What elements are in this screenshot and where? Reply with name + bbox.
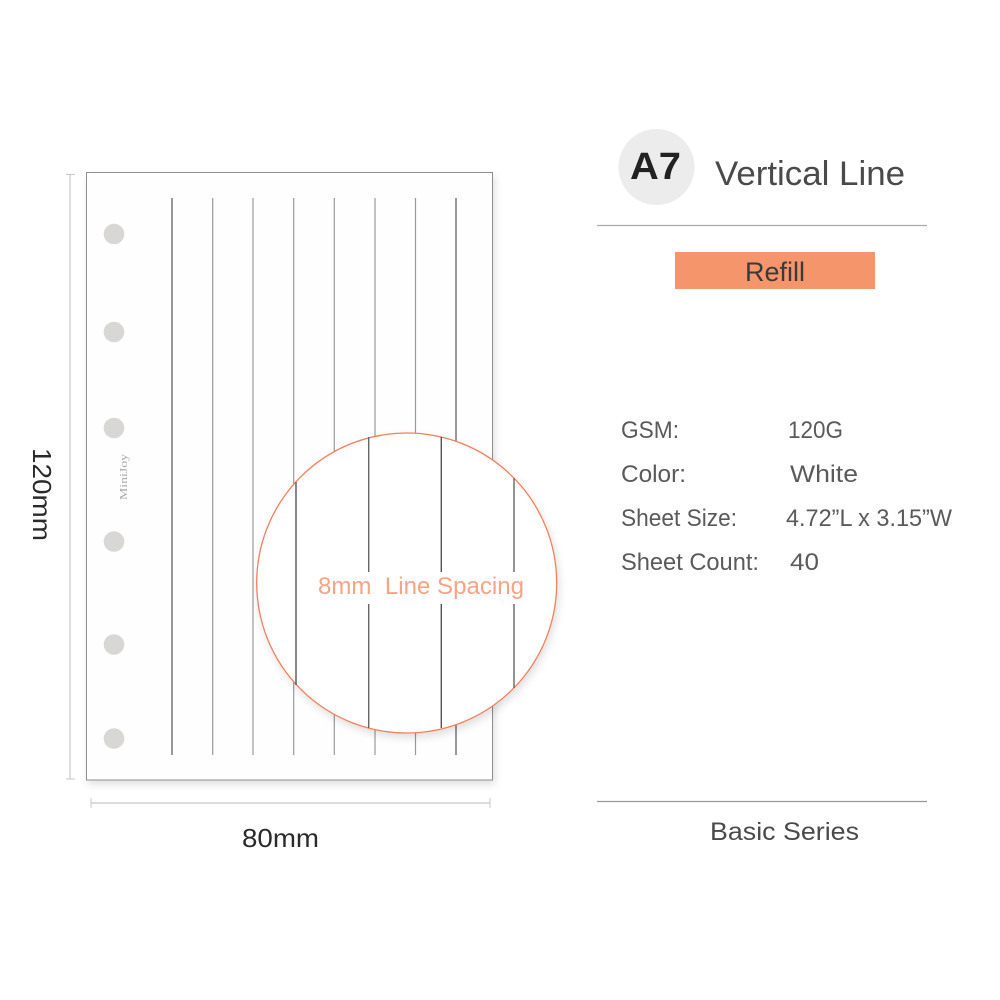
height label: 120mm [27, 448, 57, 541]
spec: sheet size: 4.72”L x 3.15”W [786, 505, 952, 532]
specifications list [621, 417, 952, 576]
spec: GSM: GSM: [621, 417, 679, 444]
vertical ruled lines [172, 198, 456, 755]
spec: sheet count: 40 [790, 549, 819, 576]
width label: 80mm [242, 823, 319, 853]
magnified lines [296, 437, 514, 728]
product title: Vertical Line [715, 155, 905, 193]
spec: GSM: 120G [788, 417, 843, 444]
series label: Basic Series [710, 818, 859, 846]
spec: color: White [790, 461, 858, 488]
magnifier circle [257, 433, 557, 733]
footer divider [597, 800, 927, 802]
spec: color [621, 461, 858, 488]
title block [618, 129, 905, 205]
brand mark: MiniJoy [118, 453, 130, 500]
refill tag [675, 252, 875, 289]
spec: color: Color: [621, 461, 686, 488]
callout: magnified line spacing [257, 433, 557, 733]
refill tag: Refill [745, 257, 805, 287]
size badge [618, 129, 694, 205]
header divider [597, 224, 927, 226]
panel: refill sheet [86, 172, 492, 780]
spec: GSM [621, 417, 843, 444]
binder holes [104, 224, 124, 749]
spacing label: 8mm Line Spacing [318, 573, 524, 600]
sheet outline [86, 172, 492, 780]
spec: sheet size [621, 505, 952, 532]
spec: sheet size: Sheet Size: [621, 505, 737, 532]
size label: A7 [630, 146, 681, 188]
spec: sheet count: Sheet Count: [621, 549, 759, 576]
